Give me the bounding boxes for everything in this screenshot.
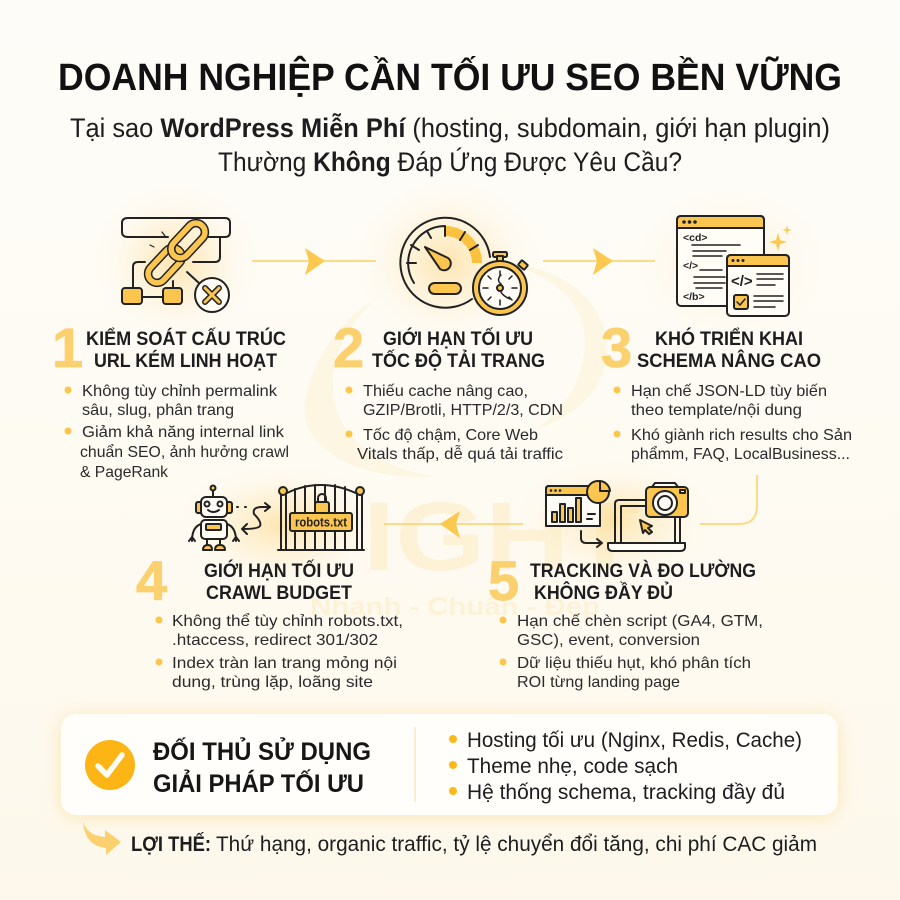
bullets 5: Dữ liệu thiếu hụt, khó phân tích <box>517 655 751 672</box>
icon: broken chain link <box>122 218 230 312</box>
bullets 3: theo template/nội dung <box>631 402 802 419</box>
heading 4: CRAWL BUDGET <box>206 582 352 604</box>
bullets 2: GZIP/Brotli, HTTP/2/3, CDN <box>363 402 563 419</box>
card heading: ĐỐI THỦ SỬ DỤNG <box>153 736 371 766</box>
heading 4: GIỚI HẠN TỐI ƯU <box>204 558 354 582</box>
arrow: step 3 to 5 <box>700 475 757 524</box>
icon: code windows: </> <box>731 273 753 290</box>
bullets 5: Hạn chế chèn script (GA4, GTM, <box>517 613 763 630</box>
icon: robot and robots.txt gate <box>189 485 364 550</box>
arrow: step 1 to 2 <box>252 248 376 275</box>
bullets 2: Thiếu cache nâng cao, <box>363 383 528 400</box>
bullets 1 <box>64 383 289 481</box>
arrow: step 2 to 3 <box>543 248 655 275</box>
heading 1: URL KÉM LINH HOẠT <box>94 349 277 372</box>
bullets 5: GSC), event, conversion <box>517 632 700 649</box>
card heading: GIẢI PHÁP TỐI ƯU <box>153 768 364 798</box>
heading 1 <box>86 326 286 372</box>
card bullets: Theme nhẹ, code sạch <box>467 755 678 778</box>
heading 2: TỐC ĐỘ TẢI TRANG <box>372 348 545 372</box>
arrow: step 5 to 4 <box>384 511 523 538</box>
number 2: 2 <box>333 316 364 379</box>
bullets 2 <box>346 383 563 463</box>
subtitle: Tại sao WordPress Miễn Phí (hosting, subdomain, giới hạn plugin) <box>70 112 830 143</box>
card bullets: Hệ thống schema, tracking đầy đủ <box>467 781 785 804</box>
icon: code windows: </b> <box>683 291 705 303</box>
number 5: 5 <box>488 549 519 612</box>
heading 1: KIỂM SOÁT CẤU TRÚC <box>86 326 286 350</box>
bullets 4 <box>156 612 403 691</box>
number 4: 4 <box>136 549 167 612</box>
panel 5: tracking <box>488 481 763 691</box>
card heading <box>153 736 371 798</box>
bullets 4: dung, trùng lặp, loãng site <box>172 674 373 691</box>
heading 5 <box>530 558 756 604</box>
bullets 5: ROI từng landing page <box>517 674 680 691</box>
icon glows <box>94 180 825 587</box>
heading 4 <box>204 558 354 604</box>
title: DOANH NGHIỆP CẦN TỐI ƯU SEO BỀN VỮNG <box>58 54 842 99</box>
bullets 2: Tốc độ chậm, Core Web <box>363 427 538 444</box>
icon: check circle <box>85 740 135 790</box>
benefit text: LỢI THẾ: <box>131 833 211 856</box>
arrow: benefit <box>83 822 121 855</box>
bullets 4: Không thể tùy chỉnh robots.txt, <box>172 612 403 630</box>
watermark logo: Nhanh - Chuẩn - Đẹp <box>310 593 600 621</box>
icon: speedometer and stopwatch <box>400 218 528 315</box>
bullets 1: & PageRank <box>80 464 169 481</box>
heading 3: SCHEMA NÂNG CAO <box>637 348 821 372</box>
watermark logo <box>304 263 640 621</box>
bullets 4: Index tràn lan trang mỏng nội <box>172 655 397 672</box>
panel 3: schema <box>601 216 852 463</box>
bullets 5 <box>500 613 763 691</box>
card: competitors <box>61 714 838 817</box>
number 3: 3 <box>601 316 632 379</box>
panel 4: crawl budget <box>136 485 403 691</box>
icon: code windows <box>677 216 792 316</box>
icon: code windows: </> <box>683 260 698 272</box>
heading 3 <box>637 326 821 372</box>
panel 1: URL structure <box>52 218 289 481</box>
heading 5: KHÔNG ĐẦY ĐỦ <box>534 580 673 604</box>
heading 2 <box>372 326 545 372</box>
bullets 1: sâu, slug, phân trang <box>82 402 234 419</box>
bullets 3 <box>614 383 852 463</box>
subtitle: Thường Không Đáp Ứng Được Yêu Cầu? <box>218 146 682 177</box>
card bullets: Hosting tối ưu (Nginx, Redis, Cache) <box>467 729 802 752</box>
heading 5: TRACKING VÀ ĐO LƯỜNG <box>530 558 756 582</box>
bullets 1: chuẩn SEO, ảnh hưởng crawl <box>80 443 289 461</box>
bullets 3: Khó giành rich results cho Sản <box>631 427 852 444</box>
bullets 4: .htaccess, redirect 301/302 <box>172 632 378 649</box>
bullets 1: Không tùy chỉnh permalink <box>82 383 278 400</box>
card bullets <box>449 729 802 804</box>
icon: analytics, laptop and camera <box>546 481 688 551</box>
benefit text: Thứ hạng, organic traffic, tỷ lệ chuyển đổi tăng, chi phí CAC giảm <box>216 833 817 856</box>
number 1: 1 <box>52 316 83 379</box>
icon: code windows: <cd> <box>683 232 708 244</box>
icon: robot and robots.txt gate: robots.txt <box>295 516 348 530</box>
bullets 2: Vitals thấp, dễ quá tải traffic <box>357 444 563 463</box>
bullets 1: Giảm khả năng internal link <box>82 424 285 441</box>
bullets 3: phẩmm, FAQ, LocalBusiness... <box>631 445 850 463</box>
watermark logo: IGHT <box>363 482 640 591</box>
bullets 3: Hạn chế JSON-LD tùy biến <box>631 383 827 400</box>
subtitle <box>70 112 830 177</box>
panel 2: page speed <box>333 218 563 463</box>
heading 3: KHÓ TRIỂN KHAI <box>655 326 803 350</box>
heading 2: GIỚI HẠN TỐI ƯU <box>383 326 533 350</box>
